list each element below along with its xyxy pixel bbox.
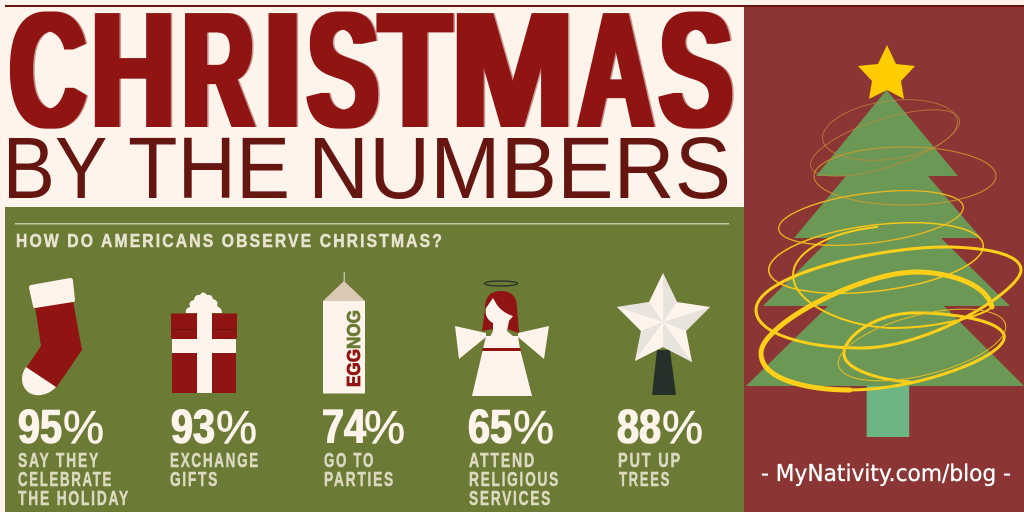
stat: 88%: 88	[617, 401, 661, 454]
stat: 95%: %	[63, 401, 104, 453]
stat: 65%	[468, 401, 560, 510]
icon: gift box	[171, 292, 237, 393]
panel: how Americans observe	[5, 207, 744, 512]
subtitle: by the numbers: THE	[128, 120, 290, 217]
stat: 65%: SERVICES	[469, 488, 552, 510]
subtitle: by the numbers	[2, 120, 731, 217]
stat: 95%: CELEBRATE	[18, 469, 113, 491]
swirl ribbon	[756, 92, 1021, 395]
stat: 95%: THE HOLIDAY	[18, 488, 130, 510]
stat: 93%: EXCHANGE	[170, 450, 260, 472]
stat: 88%: PUT UP	[618, 450, 682, 472]
stat: 65%: %	[513, 401, 554, 453]
stat: 95%: 95	[18, 401, 62, 454]
stat: 93%: GIFTS	[170, 469, 219, 491]
stat: 88%	[617, 401, 703, 491]
subtitle: by the numbers: NUMBERS	[308, 120, 731, 217]
subtitle: by the numbers: BY	[2, 120, 108, 217]
stat: 74%: PARTIES	[324, 469, 395, 491]
icon: Christmas tree	[746, 90, 1024, 386]
stat: 65%: RELIGIOUS	[469, 469, 560, 491]
icon: stocking	[22, 278, 82, 395]
stat: 88%: %	[662, 401, 703, 453]
icon: eggnog carton	[323, 272, 365, 394]
icon: angel	[455, 281, 549, 396]
stat: 88%: TREES	[619, 469, 671, 491]
stat: 95%: SAY THEY	[18, 450, 100, 472]
stat: 74%: %	[364, 401, 405, 453]
icon: tree star	[858, 45, 915, 99]
stat: 74%: 74	[322, 401, 366, 454]
title: Christmas	[10, 0, 734, 162]
stat: 65%: 65	[468, 401, 512, 454]
stat: 93%: %	[216, 401, 257, 453]
icon: star tree topper	[617, 273, 710, 395]
stat: 74%: GO TO	[324, 450, 375, 472]
stat: 95%	[18, 401, 130, 510]
panel: tree	[744, 7, 1024, 512]
website credit: - MyNativity.com/blog -	[761, 461, 1011, 487]
stat: 93%: 93	[171, 401, 215, 454]
stat: 65%: ATTEND	[469, 450, 536, 472]
heading: HOW DO AMERICANS OBSERVE CHRISTMAS?	[16, 230, 444, 251]
stat: 93%	[170, 401, 260, 491]
icon: eggnog carton: EGGNOG	[344, 310, 364, 387]
stat: 74%	[322, 401, 405, 491]
icon: tree trunk	[867, 386, 909, 437]
